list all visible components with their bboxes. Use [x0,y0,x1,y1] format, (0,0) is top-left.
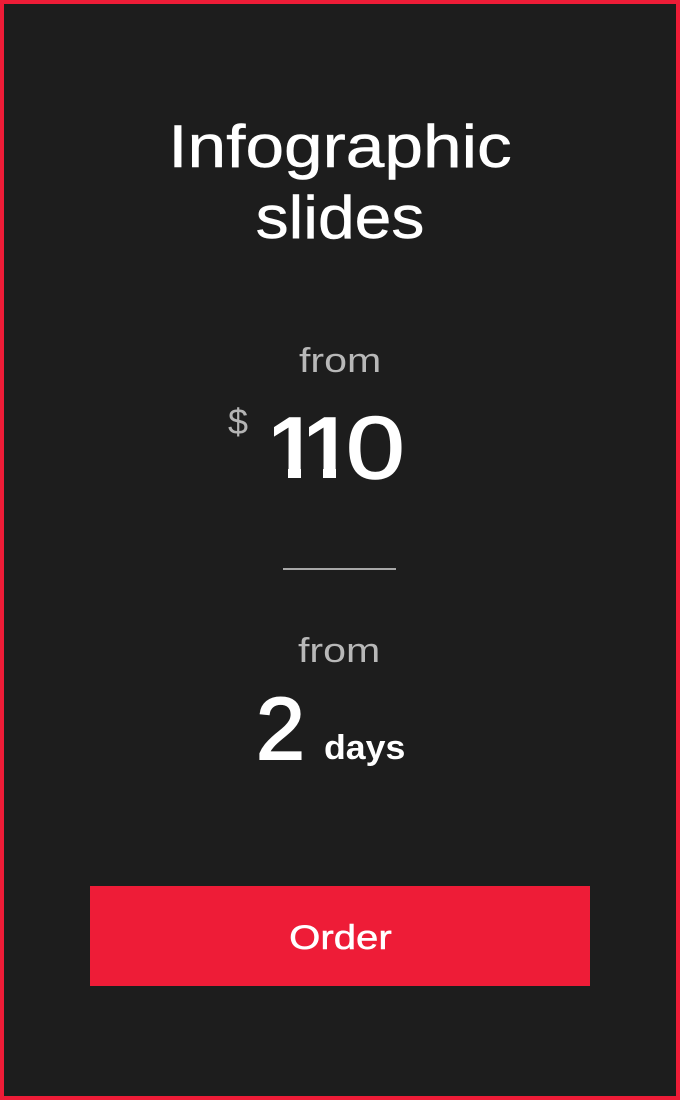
time from label: from [298,632,380,670]
divider [283,568,396,570]
title: slides [256,184,424,251]
days unit: days [324,729,405,767]
price value: 1 [303,398,352,497]
days value: 2 [256,679,305,778]
order button: Order [289,919,391,957]
price value: 0 [346,398,405,497]
dollar sign: $ [228,401,248,442]
price from label: from [299,342,381,380]
price value: 1 [268,398,317,497]
title: Infographic [168,113,512,180]
price value [274,398,405,497]
title [168,113,512,251]
order button [90,886,590,986]
